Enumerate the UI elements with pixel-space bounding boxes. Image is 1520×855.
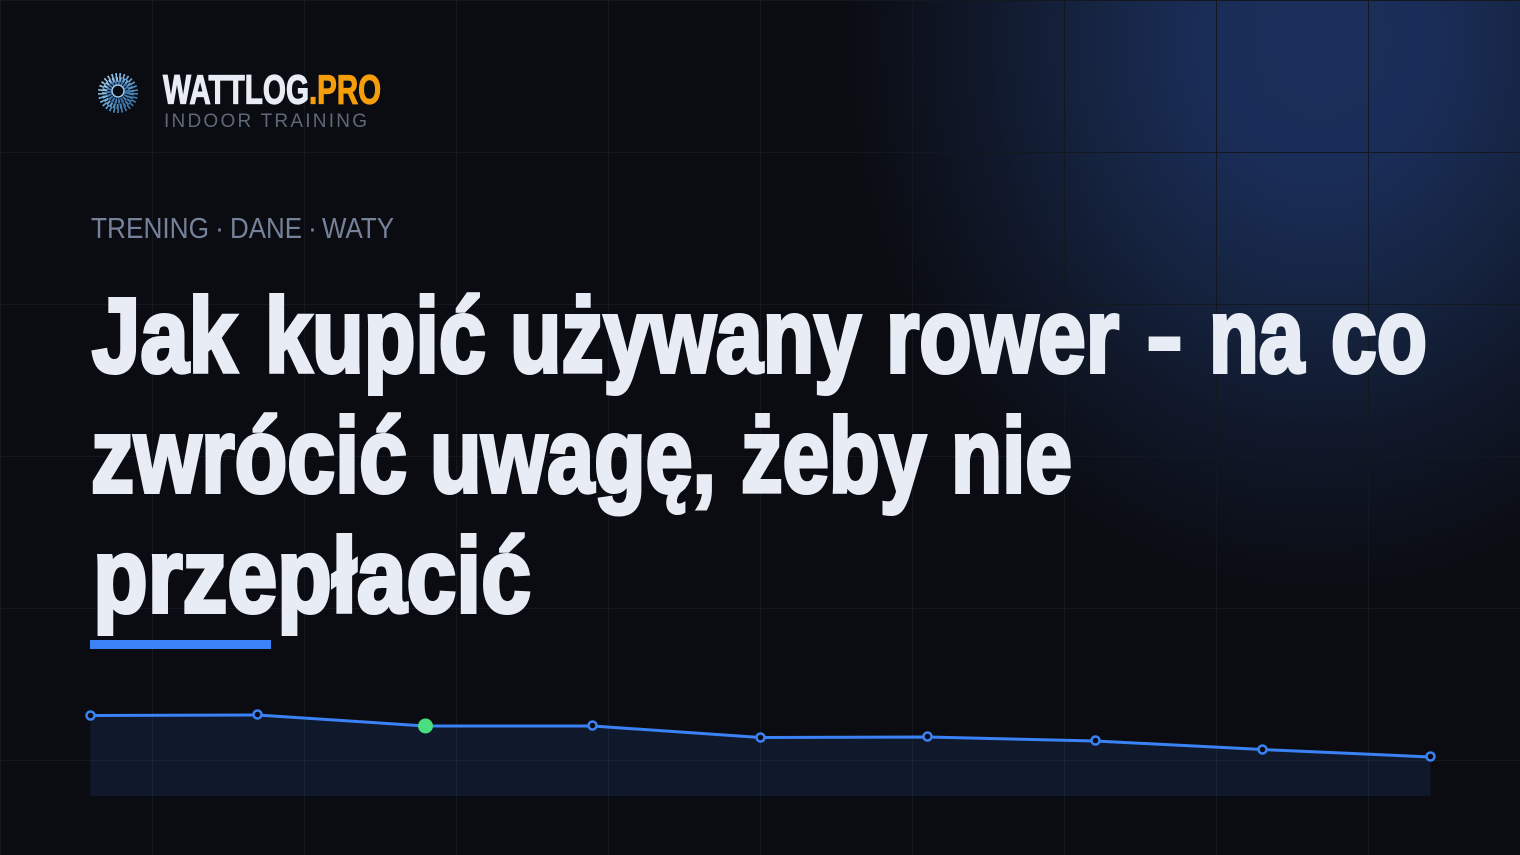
eyebrow text: WATY [322,213,394,245]
chart area fill [90,715,1430,796]
title underline accent [90,640,271,649]
brand wordmark: .PRO [309,66,381,112]
title: nie [951,397,1072,515]
eyebrow text [91,213,394,245]
eyebrow text: TRENING [91,213,209,245]
chart data points [86,710,1434,760]
line chart: power trend [86,710,1434,796]
title: na [1209,277,1305,395]
title: – [1148,277,1181,395]
brand wordmark: WATTLOG [163,66,309,112]
title: co [1331,277,1427,395]
eyebrow text: · [308,213,317,245]
icon: cassette sprocket logo [100,76,136,110]
title: rower [886,277,1119,395]
title [91,277,1427,635]
title: używany [510,277,861,395]
title: Jak [92,277,238,395]
title: uwagę, [430,397,716,515]
highlighted data point [418,718,433,734]
title: żeby [741,397,926,515]
title: przepłacić [93,517,531,635]
brand tagline: INDOOR TRAINING [164,111,367,132]
eyebrow text: · [215,213,224,245]
title: zwrócić [91,397,407,515]
chart line [90,715,1430,757]
eyebrow text: DANE [230,213,302,245]
title: kupić [265,277,486,395]
